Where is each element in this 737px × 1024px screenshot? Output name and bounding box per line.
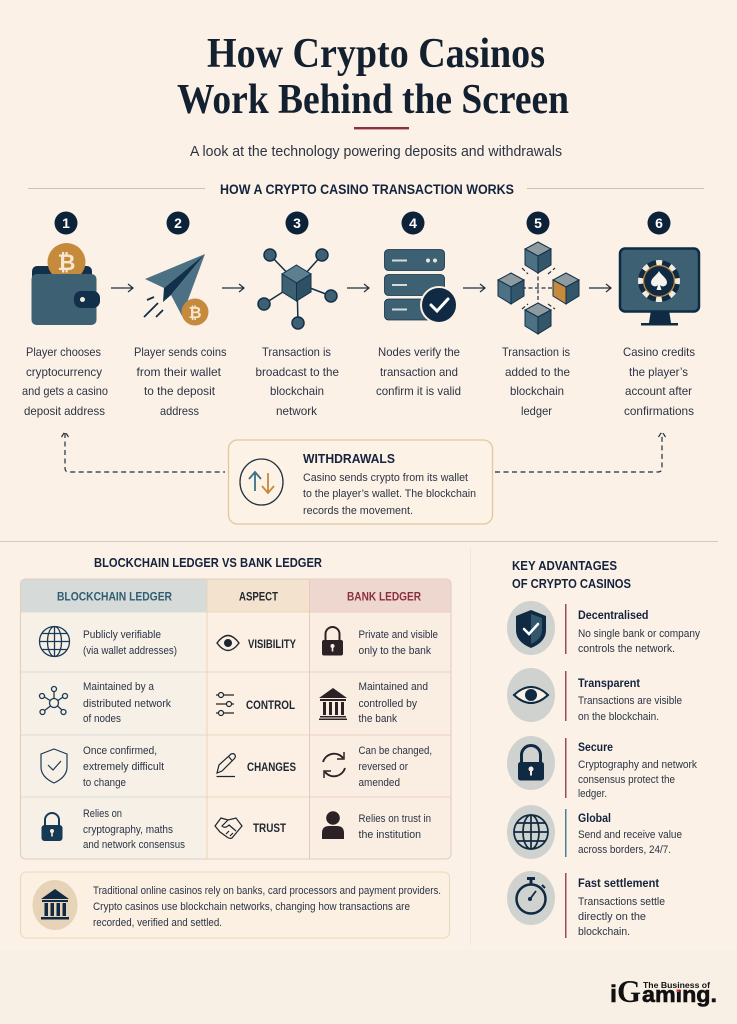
advantage: decentralised [507,601,700,655]
row: control [40,681,428,725]
text: withdrawals: Casino sends crypto from its wallet [303,472,468,484]
text: step 3: broadcast to the [256,365,339,379]
row: visibility [40,626,438,657]
text: step 6 [623,345,695,418]
row: trust: Relies on [83,808,122,820]
row: changes: Once confirmed, [83,745,157,757]
advantage: decentralised: Decentralised [578,608,648,622]
text: note: Traditional online casinos rely on banks, card processors and payment providers. [93,885,441,897]
title: How Crypto Casinos [207,31,545,77]
icon: ledger cubes [498,242,579,334]
row: control: Maintained and [358,681,428,693]
title: Work Behind the Screen [177,77,569,123]
text: step 4 [376,345,461,398]
text: step 4: transaction and [380,365,458,379]
text: note: recorded, verified and settled. [93,917,222,929]
text: withdrawals: to the player’s wallet. The blockchain [303,488,476,500]
heading: transaction: HOW A CRYPTO CASINO TRANSACTION WORKS [220,182,514,197]
advantage: decentralised: controls the network. [578,643,675,655]
arrow 1 [111,284,133,292]
text: step 3: Transaction is [262,345,331,359]
row: changes: Can be changed, [358,745,432,757]
row: visibility: Publicly verifiable [83,629,161,641]
row: changes: to change [83,777,126,789]
text: step 5: added to the [505,365,570,379]
advantage: global: Global [578,811,611,825]
text: step 2: from their wallet [136,365,222,379]
icon: person [322,811,344,839]
icon: bank [319,688,347,720]
step 2: 2 [174,215,182,231]
table: ledger comparison [20,579,451,859]
icon: shield check [41,749,67,783]
icon: node network [40,686,68,714]
step 4: 4 [409,215,417,231]
row: trust [42,808,431,851]
step 5: 5 [534,215,542,231]
icon: globe [40,626,70,656]
advantage: decentralised: No single bank or company [578,628,700,640]
advantage: fast settlement: Fast settlement [578,876,659,890]
text: step 1: deposit address [24,404,105,418]
icon: monitor with casino chip [620,248,699,326]
logo: iGaming: i [610,981,617,1008]
icon: server with check [384,250,457,323]
row: changes: amended [358,777,400,789]
step 6 [620,212,699,418]
title [177,31,569,123]
icon: wallet with coin: ₿ [58,250,75,275]
advantage: fast settlement: Transactions settle [578,896,665,908]
step 4 [376,212,461,398]
row: changes: CHANGES [247,760,296,774]
arrow 2 [222,284,244,292]
arrow: withdrawal return left [62,432,225,472]
text: step 6: Casino credits [623,345,695,359]
heading: ledger comparison: BLOCKCHAIN LEDGER VS BANK LEDGER [94,556,322,570]
arrow 4 [463,284,485,292]
text: step 2 [134,345,226,418]
icon: network cube [258,249,337,329]
advantage: transparent: Transactions are visible [578,695,682,707]
logo: iGaming: aming. [642,982,717,1007]
advantage: global: Send and receive value [578,829,682,841]
advantage: fast settlement: blockchain. [578,926,630,938]
text: step 5: Transaction is [502,345,570,359]
step 5 [498,212,579,418]
step 3: 3 [293,215,301,231]
icon: up and down arrows [240,459,283,505]
logo: iGaming [610,973,717,1009]
text: step 4: confirm it is valid [376,384,461,398]
row: changes: reversed or [358,761,408,773]
text: step 5: blockchain [510,384,564,398]
row: visibility: only to the bank [358,645,431,657]
header: aspect: ASPECT [239,590,279,604]
step 1 [22,212,108,418]
text: step 1: and gets a casino [22,384,108,398]
icon: sliders [216,692,234,716]
icon: globe [514,815,548,849]
text: step 3: network [276,404,318,418]
row: visibility: Private and visible [358,629,438,641]
row: trust: the institution [358,829,421,841]
advantage: secure: consensus protect the [578,774,675,786]
header: bank ledger: BANK LEDGER [347,590,421,604]
icon: pencil [216,754,235,776]
text: withdrawals: WITHDRAWALS [303,452,395,466]
heading: key advantages [512,559,631,591]
row: visibility: (via wallet addresses) [83,645,177,657]
advantage: secure: Cryptography and network [578,759,697,771]
icon: padlock [518,746,544,780]
step 1: 1 [62,215,70,231]
text: step 2: Player sends coins [134,345,226,359]
text: note [93,885,441,929]
row: trust: TRUST [253,821,287,835]
icon: wallet with coin [32,243,100,325]
icon: eye [514,687,548,703]
text: step 1: Player chooses [26,345,101,359]
row: trust: cryptography, maths [83,824,173,836]
arrow: withdrawal return right [495,432,666,472]
logo: iGaming: The Business of [643,980,710,990]
subtitle: A look at the technology powering deposits and withdrawals [190,144,562,160]
advantage: fast settlement: directly on the [578,911,646,923]
step 6: 6 [655,215,663,231]
text: step 5: ledger [521,404,552,418]
advantage: transparent: Transparent [578,676,640,690]
row: changes: extremely difficult [83,761,164,773]
row: trust: Relies on trust in [358,813,431,825]
text: step 5 [502,345,570,418]
text: step 6: the player’s [629,365,688,379]
advantage: secure [507,736,697,800]
heading: key advantages: KEY ADVANTAGES [512,559,617,573]
advantage: transparent: on the blockchain. [578,711,659,723]
heading: key advantages: OF CRYPTO CASINOS [512,577,631,591]
advantage: global: across borders, 24/7. [578,844,671,856]
icon: paper plane with coin: ₿ [188,304,202,322]
header: blockchain ledger: BLOCKCHAIN LEDGER [57,590,172,604]
text: withdrawals: records the movement. [303,505,413,517]
row: control: the bank [358,713,397,725]
row: changes [41,745,432,789]
text: note: Crypto casinos use blockchain networks, changing how transactions are [93,901,410,913]
panel: traditional casinos note [20,872,450,938]
text: withdrawals [303,452,476,517]
icon: handshake [215,818,242,838]
icon: stopwatch [516,877,546,914]
arrow 5 [589,284,611,292]
text: step 4: Nodes verify the [378,345,460,359]
icon: refresh [323,752,345,778]
icon: padlock [322,627,343,656]
advantage: fast settlement [507,871,665,938]
text: step 3 [256,345,339,418]
row: control: controlled by [358,698,417,710]
text: step 6: confirmations [624,404,694,418]
text: step 2: address [160,404,199,418]
panel: withdrawals [228,440,492,524]
row: trust: and network consensus [83,839,185,851]
icon: paper plane with coin [144,254,208,326]
row: control: of nodes [83,713,121,725]
advantage: global [507,805,682,859]
text: step 1: cryptocurrency [26,365,102,379]
icon: padlock blue [42,813,62,841]
advantage: transparent [507,668,682,723]
row: visibility: VISIBILITY [248,637,296,651]
row: control: distributed network [83,698,171,710]
step 3 [256,212,339,418]
text: step 6: account after [625,384,692,398]
advantage: secure: Secure [578,740,613,754]
row: control: CONTROL [246,698,295,712]
step 2 [134,212,226,418]
icon: bank in circle [32,880,78,930]
icon: eye [217,636,239,650]
text: step 3: blockchain [270,384,324,398]
text: step 2: to the deposit [144,384,216,398]
advantage: secure: ledger. [578,788,607,800]
text: step 1 [22,345,108,418]
arrow 3 [347,284,369,292]
row: control: Maintained by a [83,681,155,693]
icon: shield [516,610,546,648]
logo: iGaming: G [617,973,641,1009]
